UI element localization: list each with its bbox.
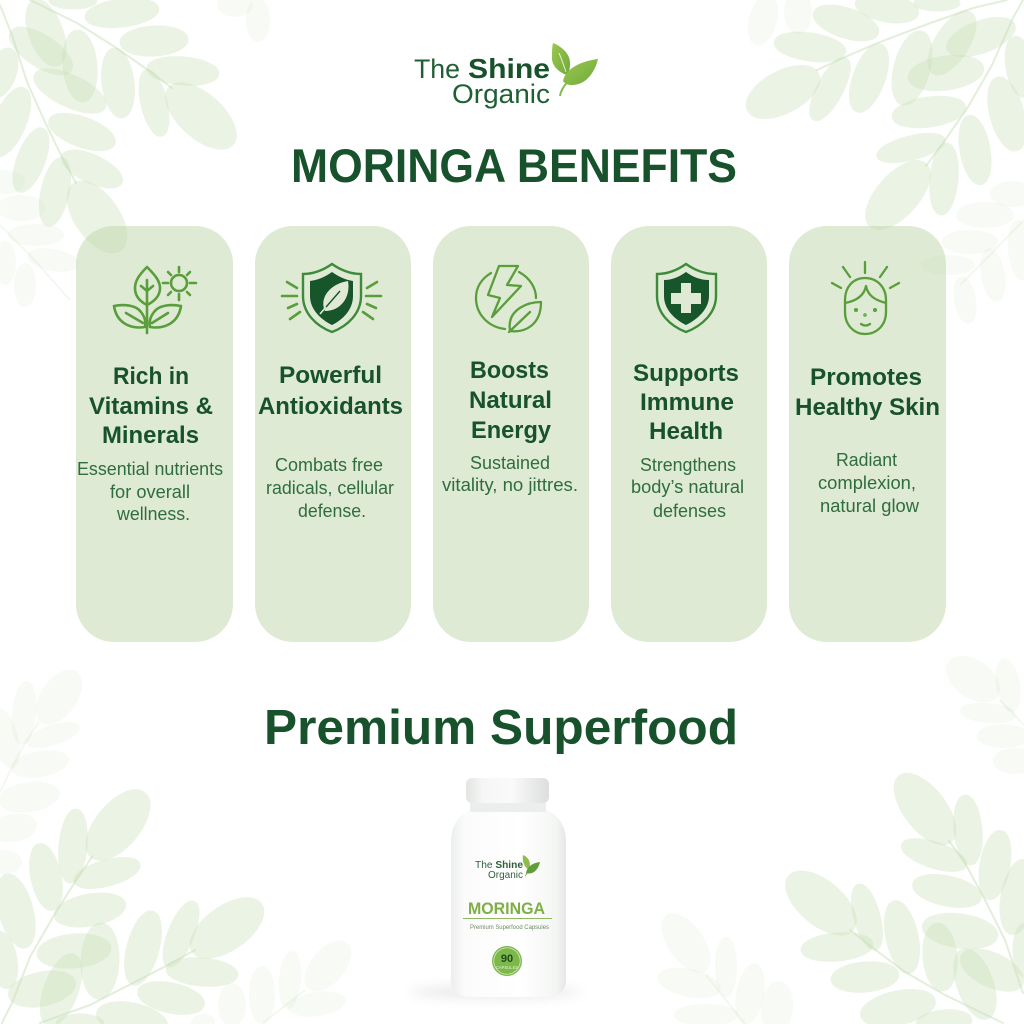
heading: Premium Superfood: Premium Superfood [264,700,738,755]
bottle body [451,810,566,997]
panel: Powerful Antioxidants [255,226,411,642]
description [77,459,223,524]
description: Strengthens [640,455,736,475]
bottle neck [470,803,546,812]
heading [633,360,739,445]
description: Essential nutrients [77,459,223,479]
heading: Immune [640,389,734,416]
icon: plant and sun [114,267,196,333]
background foliage: bottom-left [0,664,357,1024]
bottle label logo: Organic [488,869,523,881]
product bottle [410,778,580,997]
background foliage: bottom-right [655,649,1024,1024]
background foliage: top-right [741,0,1024,323]
icon: shield with cross [657,264,716,332]
description: Combats free [275,455,383,475]
description: defenses [653,501,726,521]
description [818,450,920,516]
bottle cap [466,778,549,803]
background foliage: top-left [0,0,268,305]
heading: Powerful [279,362,382,389]
description [266,455,394,521]
description: for overall [110,482,190,502]
heading: Healthy Skin [795,394,940,421]
description: wellness. [116,504,190,524]
description: Sustained [470,453,550,473]
description: defense. [298,501,366,521]
bottle label logo: The Shine [475,859,523,871]
description: Radiant [836,450,897,470]
bottle label logo [475,855,540,881]
logo: The Shine Organic: Organic [452,79,550,109]
description: body’s natural [631,477,744,497]
heading: Boosts [470,357,549,384]
heading: Vitamins & [89,393,213,420]
heading: Natural [469,387,552,414]
heading: Antioxidants [258,393,403,420]
capsule count badge: 90 [501,953,513,965]
heading [795,364,940,421]
title: MORINGA BENEFITS: MORINGA BENEFITS [291,139,737,192]
description: vitality, no jittres. [442,475,578,495]
heading [89,363,213,449]
description: natural glow [820,496,920,516]
panel: Promotes Healthy Skin [789,226,946,642]
label rule [463,918,552,919]
heading: Supports [633,360,739,387]
capsule count badge [492,946,522,976]
description [442,453,578,495]
logo: The Shine Organic: The [414,54,460,84]
description: radicals, cellular [266,478,394,498]
label subtitle: Premium Superfood Capsules [470,924,550,931]
icon: glowing face [832,262,899,334]
panel: Rich in Vitamins & Minerals [76,226,233,642]
panel: Supports Immune Health [611,226,767,642]
capsule count badge: CAPSULES [496,965,518,970]
icon: lightning bolt with leaf [476,266,541,332]
bottle label name: MORINGA [468,899,545,918]
heading: Minerals [102,422,199,449]
icon: shield with leaf [282,264,381,332]
heading: Rich in [113,363,189,390]
logo: The Shine Organic: Shine [468,53,550,84]
heading: Health [649,418,723,445]
heading: Energy [471,417,551,444]
heading [469,357,552,444]
logo: The Shine Organic [414,43,598,109]
heading: Promotes [810,364,922,391]
description: complexion, [818,473,916,493]
panel: Boosts Natural Energy [433,226,589,642]
description [631,455,744,521]
heading [258,362,403,420]
icon: logo leaves [552,43,598,96]
